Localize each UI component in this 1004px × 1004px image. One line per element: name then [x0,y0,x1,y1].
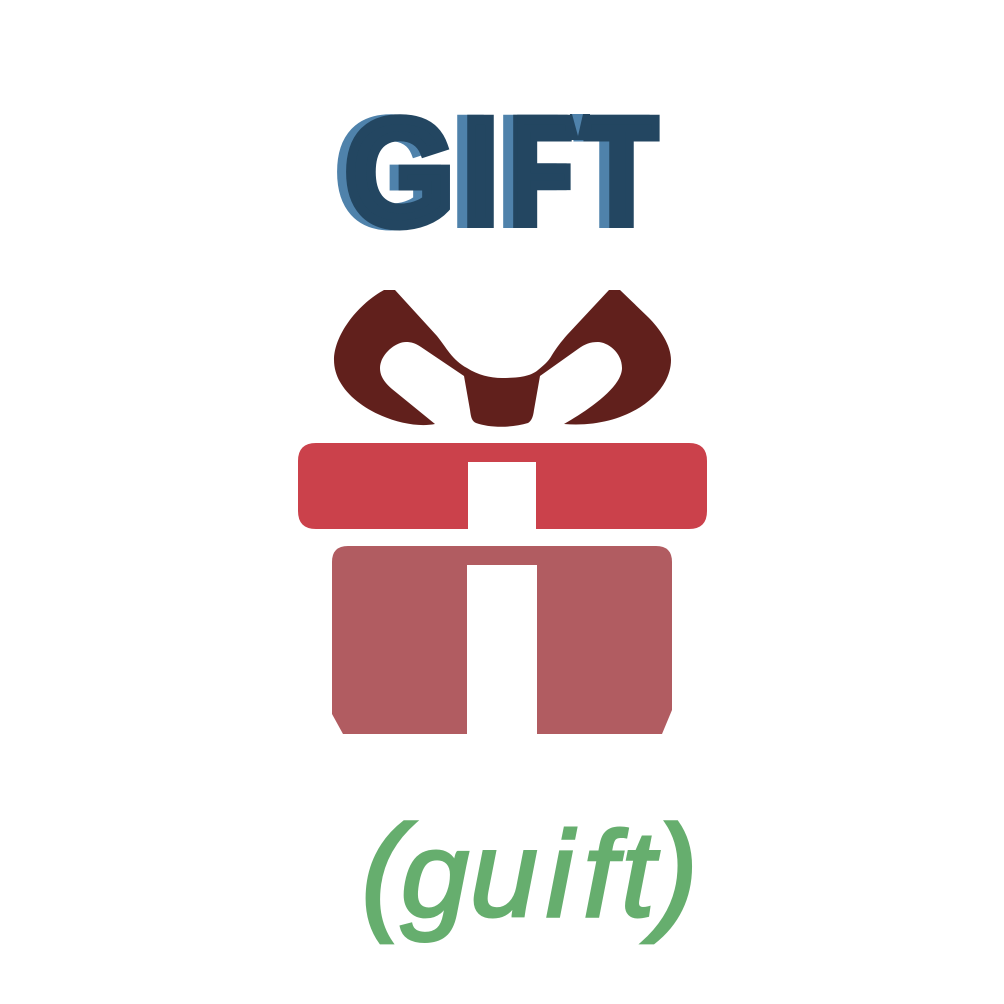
title: GIFT: T [586,87,657,255]
pronunciation: (guift): ) [642,798,698,944]
title: GIFT: F [510,87,568,255]
box body [332,546,672,734]
title: GIFT [336,87,657,256]
title: GIFT: F [514,87,572,255]
title: GIFT: G [336,88,445,256]
title: GIFT: G [345,88,454,256]
pronunciation: (guift): ( [361,798,416,944]
title: GIFT: I [463,87,498,255]
icon: gift box [298,290,707,734]
title: GIFT: F [500,87,558,255]
title: GIFT: T [576,87,647,255]
bow [334,290,671,427]
lid [298,443,707,529]
pronunciation: (guift): guift [401,806,660,942]
title: GIFT: I [453,87,488,255]
